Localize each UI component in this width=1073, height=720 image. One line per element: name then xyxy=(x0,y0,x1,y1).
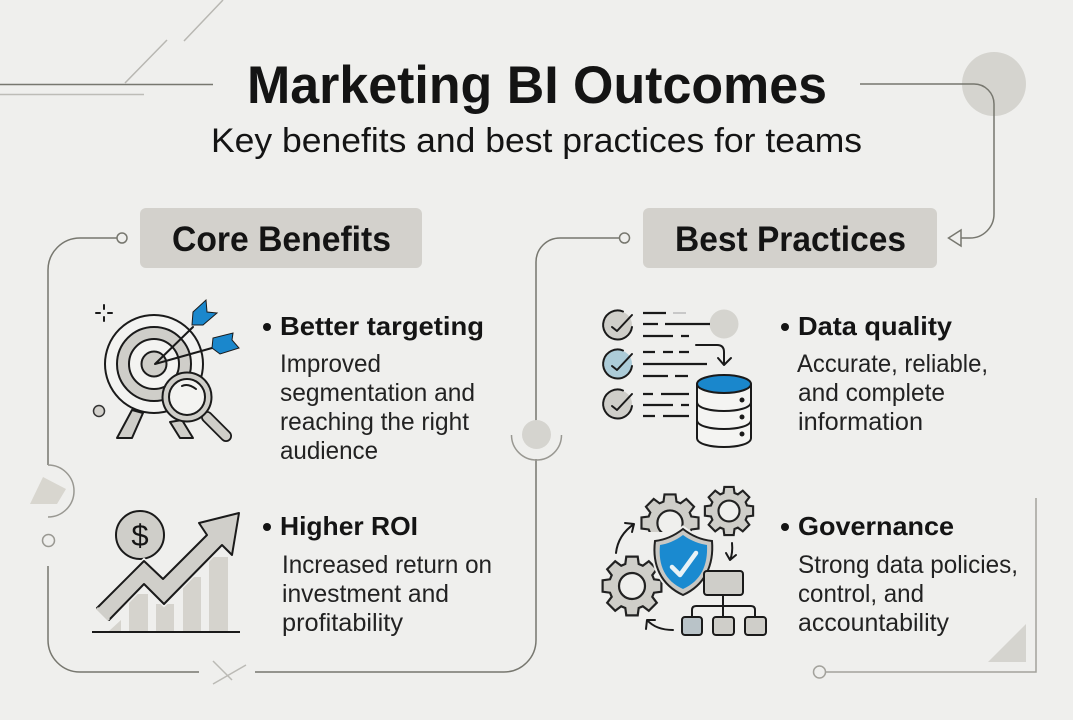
item: better targeting: segmentation and xyxy=(280,379,475,407)
item: governance: Strong data policies, xyxy=(798,551,1018,579)
item: governance: accountability xyxy=(798,609,949,637)
item: better targeting: reaching the right xyxy=(280,408,469,436)
item: better targeting: audience xyxy=(280,437,378,465)
heading: core benefits: Core Benefits xyxy=(172,220,391,259)
decorative corner lines: top left xyxy=(0,0,223,94)
item: better targeting: Improved xyxy=(280,350,381,378)
heading: best practices: Best Practices xyxy=(675,220,906,259)
item: governance: Governance xyxy=(798,511,954,541)
item: better targeting: Better targeting xyxy=(280,311,484,341)
item: governance: control, and xyxy=(798,580,924,608)
icon: rising ROI chart xyxy=(92,511,240,632)
icon: governance gears, shield and org chart xyxy=(603,487,766,635)
item: data quality: Data quality xyxy=(798,311,953,341)
connector: center line to best practices xyxy=(512,233,630,460)
item: data quality: Accurate, reliable, xyxy=(797,350,988,378)
item: higher ROI: Higher ROI xyxy=(280,511,418,541)
item: data quality: and complete xyxy=(798,379,945,407)
item: higher ROI xyxy=(263,511,492,637)
icon: rising ROI chart: $ xyxy=(131,518,149,553)
heading: core benefits xyxy=(140,208,422,268)
icon: target with arrows and magnifier xyxy=(94,300,239,438)
item: higher ROI: profitability xyxy=(282,609,404,637)
item: higher ROI: Increased return on xyxy=(282,551,492,579)
item: higher ROI: investment and xyxy=(282,580,449,608)
title: Marketing BI Outcomes xyxy=(247,56,827,115)
item: governance xyxy=(781,511,1018,637)
item: better targeting xyxy=(263,311,484,465)
subtitle: Key benefits and best practices for teams xyxy=(211,122,862,160)
connector: left frame xyxy=(30,233,536,684)
panel: core benefits xyxy=(92,208,492,637)
decorative frame: bottom right xyxy=(814,498,1036,678)
panel: best practices xyxy=(603,208,1018,637)
item: data quality xyxy=(781,311,988,436)
heading: best practices xyxy=(643,208,937,268)
item: data quality: information xyxy=(798,408,923,436)
connector: title to best practices xyxy=(860,52,1026,246)
icon: checklist and database xyxy=(603,310,751,447)
